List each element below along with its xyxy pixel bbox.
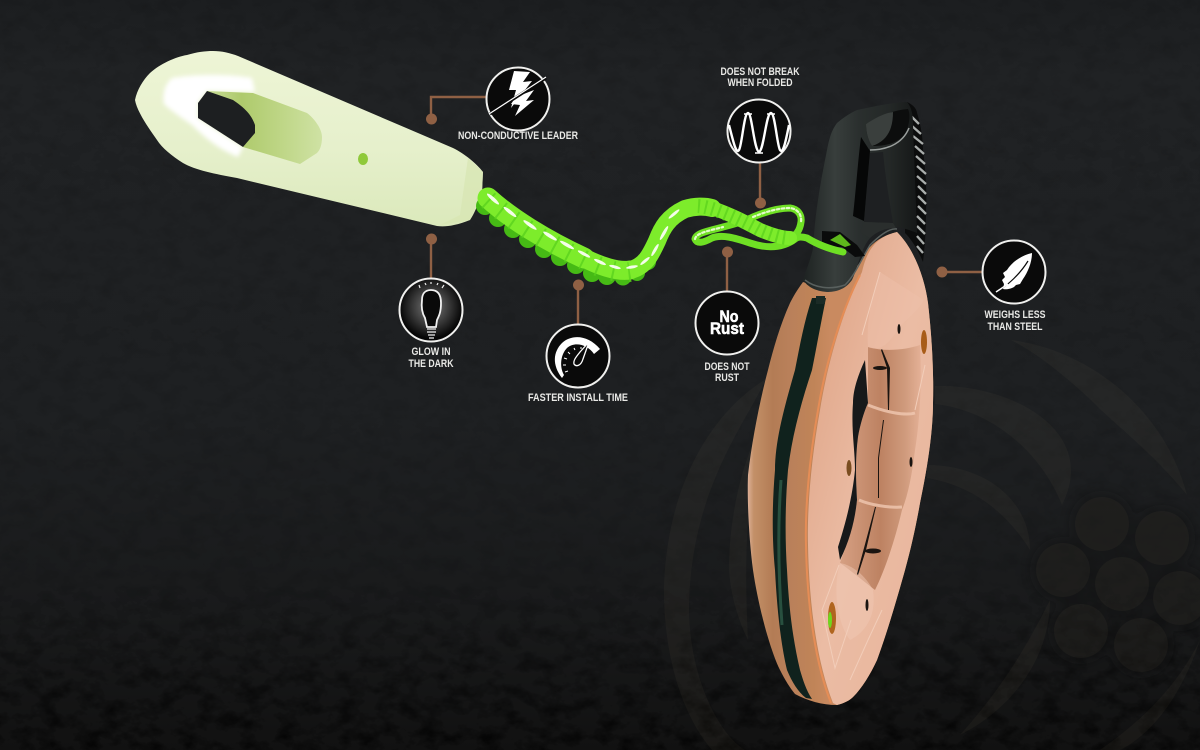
thin loop and tail	[695, 208, 843, 252]
label: DOES NOT	[704, 361, 750, 373]
reel groove highlight	[779, 480, 782, 625]
handle lower bar	[860, 222, 896, 238]
leader body	[135, 51, 483, 226]
label: FASTER INSTALL TIME	[528, 392, 628, 404]
callout: faster install time	[528, 280, 628, 404]
callout: weighs less than steel: THAN STEEL	[988, 321, 1043, 333]
icon: no rust	[696, 292, 758, 354]
reel	[748, 232, 933, 705]
label: DOES NOT BREAK	[720, 66, 800, 78]
callout: does not break when folded: WHEN FOLDED	[728, 77, 793, 89]
callout: glow in the dark	[400, 234, 462, 370]
callout: does not rust: RUST	[715, 372, 739, 384]
callout: does not break when folded	[720, 66, 800, 208]
groove tab	[816, 296, 825, 304]
reel edge highlight	[806, 275, 860, 703]
handle body	[803, 102, 917, 292]
reel slots	[857, 324, 912, 611]
icon: light bulb	[400, 278, 462, 342]
reel corner lobes	[868, 272, 924, 349]
leader recess	[207, 91, 322, 164]
icon: no rust: No	[720, 307, 738, 326]
leader highlight	[163, 75, 255, 157]
reel window opening	[838, 360, 868, 560]
reel face	[808, 232, 933, 705]
icon: lightning bolts	[486, 68, 550, 130]
handle rim highlight	[870, 128, 909, 150]
callout: non-conductive leader	[426, 68, 578, 142]
icon: no rust: Rust	[710, 319, 744, 338]
reel face panel lines	[822, 272, 925, 680]
watermark logo	[664, 340, 1200, 750]
label: WEIGHS LESS	[984, 309, 1046, 321]
rope scalloped underside	[476, 197, 656, 286]
callout: glow in the dark: THE DARK	[408, 358, 454, 370]
leader eyelet hole	[198, 91, 255, 147]
icon: speedometer	[546, 324, 610, 388]
reel outer body	[748, 232, 933, 705]
label: GLOW IN	[412, 346, 451, 358]
tape slot	[822, 231, 865, 257]
background	[0, 544, 1200, 750]
fish tape leader	[135, 51, 483, 226]
handle inner shadow	[853, 137, 870, 221]
rope white streaks	[486, 192, 680, 270]
rope thick body	[488, 198, 790, 270]
reel rivets	[921, 330, 927, 354]
callout: weighs less than steel	[936, 240, 1046, 333]
icon: wave	[728, 100, 790, 162]
leader dot	[358, 153, 368, 165]
callout: does not rust	[696, 246, 758, 384]
label: NON-CONDUCTIVE LEADER	[458, 130, 578, 142]
leader tip facet	[440, 158, 483, 225]
icon: feather	[982, 240, 1046, 304]
handle top recess	[866, 109, 909, 146]
rope twist grooves	[488, 200, 630, 272]
tape in slot	[830, 234, 851, 247]
reel inner wall	[840, 345, 921, 590]
reel wall ribs	[859, 405, 915, 507]
green rope	[476, 192, 851, 286]
handle window	[864, 152, 893, 223]
reel groove with tape	[773, 298, 826, 699]
black reel handle	[803, 102, 926, 304]
handle ridged strip	[905, 102, 926, 262]
